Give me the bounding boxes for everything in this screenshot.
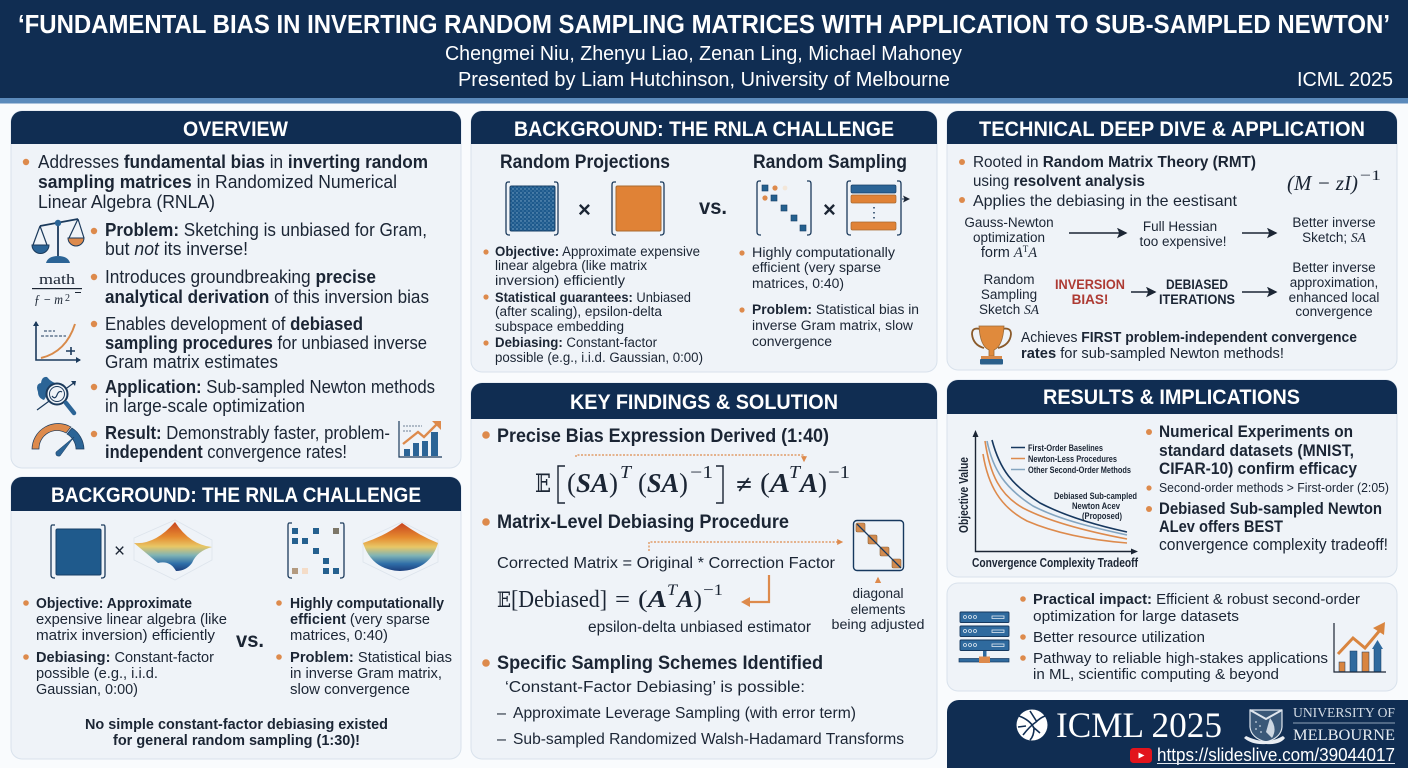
text: debiasing: Debiasing: Constant-factor	[495, 335, 657, 350]
conclusion note: No simple constant-factor debiasing existed	[85, 717, 388, 733]
line chart	[957, 430, 1139, 570]
text: debiasing bullet	[23, 650, 214, 698]
text: problem bullet right: slow convergence	[290, 682, 410, 698]
text: application bullet	[91, 376, 435, 416]
text: efficiency: Highly computationally	[752, 245, 895, 260]
flow: bottom row: Sampling	[981, 287, 1037, 302]
formula: resolvent	[1287, 168, 1381, 195]
caption: estimator: epsilon-delta unbiased estimator	[588, 619, 811, 636]
text: intro bullet: Linear Algebra (RNLA)	[38, 191, 215, 212]
heading: technical: TECHNICAL DEEP DIVE & APPLICATION	[979, 117, 1365, 141]
university name: UNIVERSITY OF	[1293, 706, 1395, 721]
y axis label: Objective Value	[957, 457, 971, 533]
text: statistical guarantees	[483, 290, 691, 334]
icon: bowl surface	[363, 522, 438, 580]
formula: bias inequality: 𝔼	[535, 469, 551, 498]
label: diagonal elements: diagonal	[852, 586, 904, 601]
text: debiased best: ALev offers BEST	[1159, 518, 1283, 536]
x axis label: Convergence Complexity Tradeoff	[972, 556, 1139, 570]
flow: top row: Better inverse	[1292, 215, 1376, 230]
text: problem bullet	[91, 219, 427, 259]
text: objective: linear algebra (like matrix	[495, 258, 647, 273]
list: schemes	[497, 705, 904, 748]
formula: debiased expectation	[497, 582, 723, 613]
dotted arrow: bias formula	[576, 455, 804, 461]
text: objective bullet: matrix inversion) efficiently	[36, 628, 216, 644]
flow: top row: optimization	[973, 230, 1045, 245]
text: objective bullet	[23, 596, 227, 644]
label: diagonal elements	[832, 586, 924, 632]
flow: bottom row: Random	[983, 272, 1035, 287]
formula: bias inequality: (SA)	[638, 468, 688, 498]
panel: overview	[11, 111, 461, 468]
multiply sign: ×	[114, 541, 125, 562]
formula: bias inequality: T	[620, 462, 633, 482]
subheading: bias expression: Precise Bias Expression Derived (1:40)	[497, 426, 829, 447]
text: debiasing	[483, 335, 703, 365]
list: schemes: –	[497, 705, 506, 722]
formula: bias inequality: −1	[690, 462, 713, 482]
flow: bottom row: enhanced local	[1289, 290, 1379, 305]
text: rmt bullet	[959, 154, 1256, 190]
elbow arrow	[741, 575, 769, 607]
text: intro bullet: Addresses fundamental bias in inverting random	[38, 151, 428, 172]
flow: bottom row: approximation,	[1290, 275, 1378, 290]
text: statistical guarantees: subspace embedding	[495, 319, 624, 334]
formula: resolvent: −1	[1360, 168, 1381, 184]
icon: sparse sampling matrix	[757, 181, 811, 235]
university name: MELBOURNE	[1293, 727, 1395, 744]
chart annotation: Debiased Sub-campled	[1054, 491, 1137, 502]
text: practical impact: Practical impact: Efficient & robust second-order	[1033, 591, 1360, 608]
subheading: sampling schemes: Specific Sampling Schemes Identified	[497, 653, 823, 674]
text: practical impact: optimization for large datasets	[1033, 608, 1239, 625]
formula: bias inequality: (A	[760, 468, 790, 498]
text: derivation bullet	[91, 266, 429, 307]
icon: curve graph	[33, 321, 81, 363]
text: intro bullet	[23, 151, 428, 212]
panel: background left	[11, 477, 461, 759]
flow: top row: form A	[981, 245, 1023, 261]
text: efficiency: matrices, 0:40)	[752, 276, 844, 291]
text: efficiency	[739, 245, 895, 291]
text: efficiency: efficient (very sparse	[752, 260, 881, 275]
formula: debiased expectation: A)	[675, 587, 702, 613]
chart legend: Other Second-Order Methods	[1028, 465, 1131, 476]
text: experiments	[1146, 423, 1358, 478]
formula: bias inequality: (SA)	[567, 468, 618, 498]
formula: bias inequality: ≠	[735, 470, 753, 498]
panel: results	[947, 380, 1397, 577]
formula: debiased expectation: 𝔼	[497, 588, 511, 612]
text: efficiency bullet: efficient (very sparse	[290, 612, 430, 628]
subheading: random projections: Random Projections	[500, 152, 670, 173]
icon: gauge	[32, 424, 84, 456]
text: achievement: rates for sub-sampled Newton methods!	[1021, 346, 1284, 362]
text: objective: inversion) efficiently	[495, 273, 625, 288]
icon: university crest	[1244, 710, 1285, 744]
text: experiments: Numerical Experiments on	[1159, 423, 1353, 441]
university name	[1293, 706, 1395, 744]
formula: bias inequality: T	[789, 462, 802, 482]
text: problem bullet right: Problem: Statistical bias	[290, 650, 452, 666]
text: debiased bullet: Gram matrix estimates	[105, 351, 278, 372]
flow: top row	[964, 215, 1376, 261]
flow: bottom row: Sketch SA	[979, 302, 1040, 317]
panel: key findings	[471, 383, 937, 759]
multiply sign: ×	[578, 197, 591, 222]
flow: bottom row	[979, 260, 1379, 319]
formula: debiased expectation: [Debiased]	[511, 587, 607, 613]
heading: results: RESULTS & IMPLICATIONS	[1043, 385, 1300, 409]
text: problem: Problem: Statistical bias in	[752, 302, 919, 317]
list: schemes: –	[497, 731, 506, 748]
list: schemes: Approximate Leverage Sampling (with error term)	[513, 705, 856, 722]
text: statistical guarantees: (after scaling), epsilon-delta	[495, 304, 662, 319]
conference name: ICML 2025	[1056, 705, 1222, 745]
text: applies bullet: Applies the debiasing in the eestisant	[973, 193, 1238, 210]
formula: bias inequality	[535, 462, 850, 503]
heading: background middle: BACKGROUND: THE RNLA CHALLENGE	[514, 117, 894, 141]
text: application bullet: Application: Sub-sampled Newton methods	[105, 376, 435, 397]
dotted arrow: to diagonal box	[649, 542, 842, 551]
text: problem bullet: Problem: Sketching is unbiased for Gram,	[105, 219, 427, 240]
flow: bottom row: Better inverse	[1292, 260, 1376, 275]
icon: trophy	[972, 326, 1011, 364]
flow: top row: Gauss-Newton	[964, 215, 1054, 230]
text: debiased best: convergence complexity tradeoff!	[1159, 536, 1388, 554]
conclusion note	[85, 717, 388, 749]
chart annotation: Newton Acev	[1072, 501, 1121, 512]
icon: orange matrix	[612, 182, 664, 235]
text: pathway: Pathway to reliable high-stakes applications	[1033, 650, 1328, 667]
icon: diagonal matrix	[854, 520, 904, 570]
text: statistical guarantees: Statistical guarantees: Unbiased	[495, 290, 691, 305]
flow: bottom row: INVERSION	[1055, 277, 1125, 292]
text: resource utilization: Better resource utilization	[1033, 629, 1205, 646]
text: problem bullet right	[276, 650, 452, 698]
chart legend: Newton-Less Procedures	[1028, 454, 1117, 465]
formula: resolvent: (M − zI)	[1287, 171, 1358, 195]
subheading: random sampling: Random Sampling	[753, 152, 907, 173]
text: achievement: Achieves FIRST problem-independent convergence	[1021, 330, 1357, 346]
text: problem bullet right: in inverse Gram matrix,	[290, 666, 442, 682]
text: experiments: CIFAR-10) confirm efficacy	[1159, 460, 1358, 478]
flow: bottom row: DEBIASED	[1166, 277, 1228, 292]
text: debiasing: possible (e.g., i.i.d. Gaussian, 0:00)	[495, 350, 703, 365]
text: debiased bullet: sampling procedures for unbiased inverse	[105, 332, 427, 353]
text: problem: convergence	[752, 334, 832, 349]
label: diagonal elements: elements	[851, 602, 906, 617]
flow: bottom row: ITERATIONS	[1159, 292, 1235, 307]
icon: math fraction	[32, 272, 82, 308]
text: derivation bullet: analytical derivation of this inversion bias	[105, 286, 429, 307]
icon: math fraction: math	[39, 272, 76, 288]
text: constant-factor: ‘Constant-Factor Debiasing’ is possible:	[505, 679, 805, 696]
formula: bias inequality: A)	[798, 468, 827, 498]
flow: top row: Full Hessian	[1143, 219, 1217, 234]
formula: debiased expectation: −1	[703, 582, 723, 599]
text: debiasing bullet: Debiasing: Constant-factor	[36, 650, 214, 666]
multiply sign: ×	[823, 197, 836, 222]
icon: sparse matrix	[288, 523, 344, 578]
icon: math fraction: 2	[65, 293, 70, 304]
icon: growth chart small	[399, 421, 442, 457]
icon: video play	[1130, 748, 1152, 763]
footer	[947, 700, 1408, 768]
chart annotation: (Proposed)	[1082, 511, 1122, 522]
header banner	[0, 0, 1408, 104]
text: debiased best: Debiased Sub-sampled Newton	[1159, 500, 1382, 518]
text: application bullet: in large-scale optimization	[105, 395, 305, 416]
icon: ICML logo	[1016, 710, 1048, 740]
chart legend: First-Order Baselines	[1028, 443, 1103, 454]
formula: corrected matrix: Corrected Matrix = Original * Correction Factor	[497, 555, 836, 572]
versus label: vs.	[699, 196, 727, 219]
heading: key findings: KEY FINDINGS & SOLUTION	[570, 390, 838, 414]
text: result bullet: Result: Demonstrably faster, problem-	[105, 422, 390, 443]
text: debiasing bullet: Gaussian, 0:00)	[36, 682, 138, 698]
subheading: debiasing procedure: Matrix-Level Debiasing Procedure	[497, 512, 789, 533]
label: diagonal elements: being adjusted	[832, 617, 924, 632]
icon: balance scale	[32, 219, 84, 263]
text: efficiency bullet: matrices, 0:40)	[290, 628, 388, 644]
flow: top row: T	[1023, 244, 1029, 254]
formula: bias inequality: −1	[828, 462, 850, 482]
icon: dotted matrix	[506, 182, 558, 235]
arrow: up to matrix	[877, 578, 879, 583]
list: schemes: Sub-sampled Randomized Walsh-Hadamard Transforms	[513, 731, 904, 748]
icon: dense matrix	[51, 525, 105, 578]
text: rmt bullet: Rooted in Random Matrix Theory (RMT)	[973, 154, 1256, 171]
text: experiments: standard datasets (MNIST,	[1159, 442, 1354, 460]
text: result bullet	[91, 422, 390, 462]
text: debiasing bullet: possible (e.g., i.i.d.	[36, 666, 158, 682]
text: problem: inverse Gram matrix, slow	[752, 318, 913, 333]
text: objective bullet: expensive linear algebra (like	[36, 612, 227, 628]
formula: debiased expectation: =	[615, 587, 630, 613]
chart legend	[1011, 443, 1131, 476]
text: problem bullet: but not its inverse!	[105, 238, 248, 259]
text: result bullet: independent convergence rates!	[105, 441, 347, 462]
icon: row sampled matrix	[847, 181, 909, 235]
heading: background left: BACKGROUND: THE RNLA CHALLENGE	[51, 483, 421, 507]
text: achievement	[1021, 330, 1357, 362]
chart annotation	[1054, 491, 1137, 522]
conclusion note: for general random sampling (1:30)!	[113, 733, 360, 749]
flow: bottom row: convergence	[1295, 304, 1373, 319]
text: objective: Objective: Approximate expensive	[495, 244, 700, 259]
text: intro bullet: sampling matrices in Randomized Numerical	[38, 171, 397, 192]
panel: practical impact	[947, 583, 1397, 691]
presenter: Presented by Liam Hutchinson, University of Melbourne	[458, 69, 950, 91]
text: derivation bullet: Introduces groundbreaking precise	[105, 266, 376, 287]
icon: math fraction: ƒ − m	[34, 293, 63, 308]
formula: debiased expectation: T	[667, 582, 678, 599]
panel: technical deep dive	[947, 111, 1397, 370]
text: problem	[739, 302, 919, 349]
icon: saddle surface	[134, 520, 212, 580]
text: efficiency bullet: Highly computationally	[290, 596, 444, 612]
text: second-order: Second-order methods > First-order (2:05)	[1159, 481, 1389, 495]
heading: overview: OVERVIEW	[183, 117, 289, 141]
text: rmt bullet: using resolvent analysis	[973, 173, 1145, 190]
text: debiased bullet	[91, 313, 427, 372]
panel: background middle	[471, 111, 937, 372]
text: pathway: in ML, scientific computing & beyond	[1033, 666, 1279, 683]
video link: https://slideslive.com/39044017	[1157, 745, 1395, 765]
text: efficiency bullet	[276, 596, 444, 644]
text: practical impact	[1020, 591, 1360, 625]
conference label: ICML 2025	[1297, 69, 1393, 91]
flow: bottom row: BIAS!	[1072, 292, 1108, 307]
icon: magnifier	[37, 377, 76, 413]
text: debiased best	[1146, 500, 1388, 554]
text: objective bullet: Objective: Approximate	[36, 596, 192, 612]
versus label: vs.	[236, 629, 264, 652]
authors: Chengmei Niu, Zhenyu Liao, Zenan Ling, Michael Mahoney	[445, 43, 962, 65]
flow: top row: too expensive!	[1139, 234, 1227, 249]
text: pathway	[1020, 650, 1328, 683]
icon: server	[959, 612, 1009, 663]
icon: growth chart	[1334, 622, 1386, 672]
flow: top row: Sketch; SA	[1302, 230, 1367, 245]
text: debiased bullet: Enables development of debiased	[105, 313, 363, 334]
formula: debiased expectation: (A	[638, 587, 667, 613]
text: objective	[483, 244, 700, 288]
flow: top row: A	[1027, 245, 1037, 261]
